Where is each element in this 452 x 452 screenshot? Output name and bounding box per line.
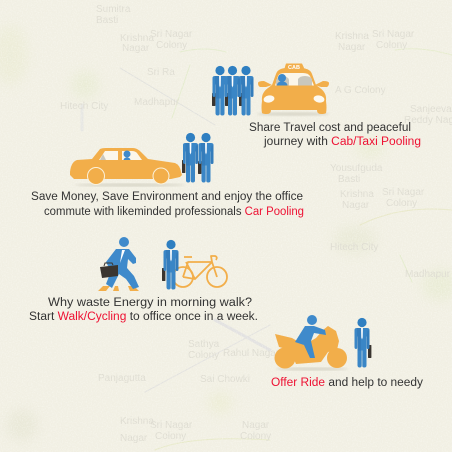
map background: Nagar [120,433,148,444]
map background: Nagar [122,43,150,54]
map background: Colony [376,40,407,51]
map background: Colony [155,431,186,442]
map background: Madhapur [405,269,451,280]
map background: Sri Nagar [382,187,425,198]
map background: A G Colony [335,85,386,96]
map background: Sri Ra [147,67,175,78]
map background: Sathya [188,339,220,350]
caption: cab pooling: journey with Cab/Taxi Pooling [263,136,421,148]
map background: Rahul Nagar [223,348,280,359]
map background: Sri Nagar [150,29,193,40]
map background: Nagar [338,42,366,53]
map background: Yousufguda [330,163,383,174]
map background: Sri Nagar [372,29,415,40]
map background: Madhapur [134,97,180,108]
map background: Hitech City [60,101,108,112]
map background: Colony [188,350,219,361]
icon: motorbike with rider [274,315,348,371]
caption: car pooling: Save Money, Save Environment and enjoy the office [31,191,303,203]
icon: man with bicycle [162,240,227,290]
map background: Hitech City [330,242,378,253]
map background: Krishna [120,33,154,44]
icon: taxi [257,64,329,116]
icon: three people with briefcases [212,66,254,116]
map background: Krishna [120,416,154,427]
caption: cab pooling: Share Travel cost and peaceful [249,122,411,134]
map background: Sanjeeva [410,104,452,115]
map background: Sri Nagar [150,420,193,431]
map background: Sai Chowki [200,374,250,385]
caption: cab pooling [249,122,421,148]
map background: Sumitra [96,4,131,15]
caption: walk / cycling: Why waste Energy in morning walk? [48,297,252,309]
caption: walk / cycling [29,297,258,323]
map background: Krishna [340,189,374,200]
map background: Basti [96,15,118,26]
cab sign: CAB [288,65,300,71]
map background: Colony [240,431,271,442]
caption: car pooling [31,191,304,218]
icon: walking man [98,237,139,291]
map background: Nagar [242,420,270,431]
map background: Colony [386,198,417,209]
icon: two people [182,133,214,182]
caption: offer ride: Offer Ride and help to needy [271,377,423,389]
caption: walk / cycling: Start Walk/Cycling to office once in a week. [29,311,258,323]
caption: car pooling: commute with likeminded professionals Car Pooling [44,206,304,218]
icon: man waiting [354,318,371,368]
map background: Colony [156,40,187,51]
icon: car [70,148,185,187]
map background: Panjagutta [98,373,146,384]
map background: Basti [338,174,360,185]
map background: Nagar [342,200,370,211]
map background: Krishna [335,31,369,42]
